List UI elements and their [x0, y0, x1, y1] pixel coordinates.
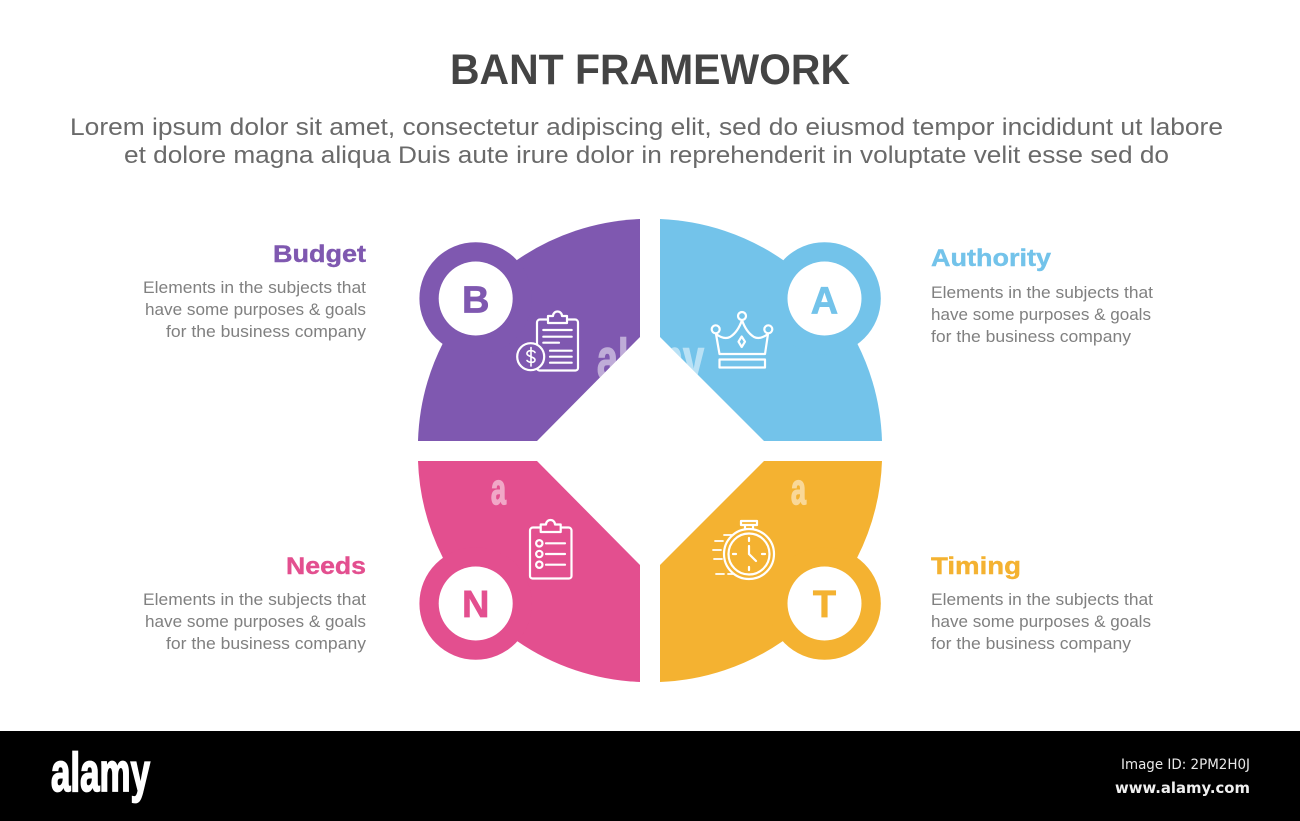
text block: authority: for the business company — [931, 328, 1132, 346]
text block: needs: Needs — [286, 553, 366, 580]
subtitle text block — [70, 114, 1223, 169]
text block: budget — [143, 241, 367, 341]
subtitle text block: Lorem ipsum dolor sit amet, consectetur adipiscing elit, sed do eiusmod tempor incididunt ut labore — [70, 114, 1223, 141]
text block: authority — [931, 245, 1153, 346]
letter N: N — [462, 584, 489, 626]
website: www.alamy.com — [1115, 779, 1250, 797]
footer logo: alamy — [51, 741, 150, 803]
text block: needs: Elements in the subjects that — [143, 591, 366, 609]
image id: Image ID: 2PM2H0J — [1121, 757, 1250, 773]
icon: clipboard with dollar coin — [517, 312, 578, 370]
text block: needs — [143, 553, 367, 653]
panel: needs segment — [418, 461, 640, 682]
letter B: B — [462, 280, 489, 322]
text block: timing: Elements in the subjects that — [931, 591, 1153, 609]
panel: authority segment — [660, 219, 882, 441]
icon: stopwatch — [713, 521, 774, 579]
icon: checklist clipboard — [530, 520, 572, 578]
watermark fragments: a — [491, 465, 506, 514]
text block: authority: Authority — [931, 245, 1051, 272]
text block: budget: have some purposes & goals — [145, 301, 366, 319]
text block: budget: for the business company — [166, 323, 367, 341]
footer bar — [0, 731, 1300, 821]
panel: timing segment — [660, 461, 882, 682]
text block: timing: have some purposes & goals — [931, 613, 1151, 631]
title: BANT FRAMEWORK — [450, 46, 850, 94]
text block: timing — [931, 553, 1153, 653]
letter T: T — [813, 584, 836, 626]
panel: budget segment — [418, 219, 640, 441]
watermark fragments: alamy — [597, 327, 704, 390]
text block: authority: Elements in the subjects that — [931, 284, 1153, 302]
text block: timing: for the business company — [931, 635, 1132, 653]
icon: crown — [712, 312, 772, 368]
watermark fragments: a — [791, 465, 806, 514]
subtitle text block: et dolore magna aliqua Duis aute irure dolor in reprehenderit in voluptate velit esse sed do — [124, 142, 1169, 169]
watermark fragments — [491, 327, 806, 514]
text block: budget: Elements in the subjects that — [143, 279, 366, 297]
text block: needs: have some purposes & goals — [145, 613, 366, 631]
text block: authority: have some purposes & goals — [931, 306, 1151, 324]
letter A: A — [811, 280, 838, 322]
text block: needs: for the business company — [166, 635, 367, 653]
text block: budget: Budget — [273, 241, 366, 268]
text block: timing: Timing — [931, 553, 1021, 580]
